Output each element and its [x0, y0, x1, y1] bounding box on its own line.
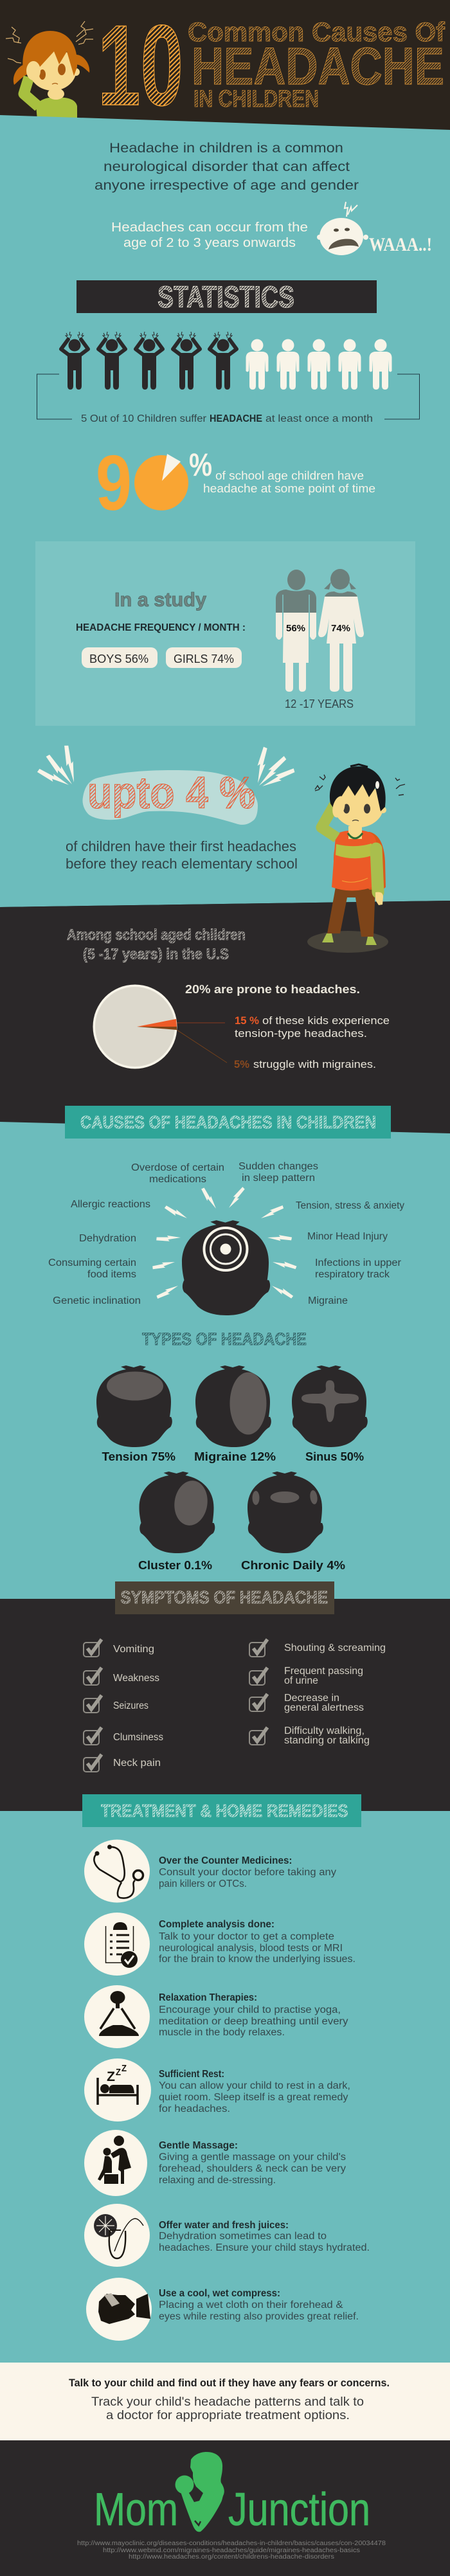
checklist: symptoms right [249, 1639, 386, 1746]
heading: statistics [76, 280, 377, 314]
remedy: cool wet compress: eyes while resting also provides great relief. [159, 2311, 359, 2322]
type: sinus [292, 1365, 368, 1463]
labels: causes: medications [149, 1174, 206, 1185]
text: 5 percent migraines: 5% [234, 1058, 249, 1070]
remedy: sufficient rest: for headaches. [159, 2103, 230, 2114]
remedy: over the counter medicines: Over the Counter Medicines: [159, 1855, 292, 1866]
labels: causes: Allergic reactions [71, 1199, 150, 1210]
pill: girls 74%: GIRLS 74% [174, 653, 234, 665]
sources: http://www.webmd.com/migraines-headaches/guide/migraines-headaches-basics [103, 2547, 360, 2554]
text: first headaches: before they reach elementary school [66, 856, 298, 872]
remedy: gentle massage [84, 2130, 346, 2196]
heading: in a study: In a study [114, 588, 207, 611]
labels: causes: Infections in upper [315, 1257, 401, 1268]
icon: massage figures [84, 2130, 147, 2196]
remedy: sufficient rest: You can allow your child to rest in a dark, [159, 2080, 350, 2091]
intro text: neurological disorder that can affect [104, 159, 350, 174]
stat: 90 percent: 9 [96, 439, 132, 527]
checklist: symptoms right: Shouting & screaming [284, 1643, 386, 1653]
illustration: boy with backpack [307, 764, 405, 953]
remedy: water and juices: Dehydration sometimes can lead to [159, 2231, 327, 2242]
title number 10: 10 [98, 1, 183, 129]
labels: causes [48, 1161, 404, 1306]
remedy: cool wet compress: Placing a wet cloth on their forehead & [159, 2300, 343, 2310]
intro text: Headache in children is a common [109, 141, 343, 156]
checklist: symptoms right: general alertness [284, 1702, 364, 1713]
chart: girl figure 74%: 74% [331, 623, 350, 634]
remedy: relaxation therapies [84, 1985, 348, 2048]
remedy: complete analysis: for the brain to know the underlying issues. [159, 1954, 356, 1965]
heading: causes of headaches [65, 1106, 391, 1139]
caption: 5 out of 10 children: 5 Out of 10 Children suffer [81, 413, 206, 424]
icon: clipboard [84, 1913, 150, 1976]
stat: 90 percent: headache at some point of time [203, 482, 375, 495]
labels: causes: Sudden changes [239, 1161, 318, 1172]
remedy: sufficient rest: Sufficient Rest: [159, 2069, 224, 2080]
checklist: symptoms left: Weakness [113, 1673, 159, 1684]
icon: sleeping in bed: Z [122, 2063, 127, 2074]
heading: symptoms of headache [115, 1581, 334, 1614]
title [98, 1, 446, 129]
chart: 5 of 10 children pictogram [37, 332, 419, 419]
caption: 5 out of 10 children: HEADACHE [210, 413, 262, 424]
icon: radiating bolts [152, 1186, 297, 1300]
age of onset text: age of 2 to 3 years onwards [123, 236, 296, 250]
heading: treatment and home remedies [82, 1794, 361, 1827]
logo: MomJunction [94, 2452, 370, 2535]
type: chronic daily [241, 1472, 345, 1572]
logo: MomJunction: Mom [94, 2484, 178, 2535]
panel: closing advice: Track your child's headache patterns and talk to [91, 2395, 364, 2409]
heading: among school aged children: Among school aged children [67, 926, 246, 944]
labels: causes: Genetic inclination [53, 1295, 141, 1306]
text: first headaches: of children have their first headaches [66, 838, 296, 854]
heading: types of headache: TYPES OF HEADACHE [142, 1329, 307, 1349]
icon: crying baby face [317, 202, 368, 255]
sources [77, 2540, 386, 2561]
checklist: symptoms right: Frequent passing [284, 1666, 363, 1677]
checklist: symptoms right: Decrease in [284, 1693, 339, 1704]
icon: sleeping in bed: Z [107, 2069, 115, 2084]
panel: dark school aged background [0, 901, 450, 1138]
text: 15 percent tension: 15 % [235, 1014, 259, 1027]
sources: http://www.mayoclinic.org/diseases-conditions/headaches-in-children/basics/causes/con-20034478 [77, 2540, 386, 2547]
logo: MomJunction: Junction [228, 2484, 370, 2535]
remedy: complete analysis: Talk to your doctor to get a complete [159, 1931, 334, 1942]
text: first headaches [66, 838, 298, 872]
icon: sleeping in bed: Z [116, 2067, 121, 2078]
remedy: gentle massage: relaxing and de-stressing. [159, 2175, 276, 2186]
checklist: symptoms right: standing or talking [284, 1735, 370, 1746]
text: 5 percent migraines: struggle with migraines. [253, 1058, 376, 1070]
remedy: gentle massage: Giving a gentle massage on your child's [159, 2152, 346, 2163]
checklist: symptoms left: Seizures [113, 1700, 148, 1711]
icon: lightning bolts left [37, 744, 77, 788]
age of onset text [111, 221, 308, 250]
type: cluster: Cluster 0.1% [138, 1559, 212, 1572]
checklist: symptoms right: Difficulty walking, [284, 1725, 364, 1736]
labels: causes: food items [87, 1269, 136, 1280]
remedy: gentle massage: forehead, shoulders & neck can be very [159, 2163, 346, 2174]
callout: WAAA: WAAA..! [369, 234, 432, 255]
chart: pie of prone children [93, 985, 227, 1068]
label: age range: 12 -17 YEARS [285, 698, 354, 710]
remedy: water and juices [84, 2204, 370, 2267]
title line: Common Causes Of: Common Causes Of [188, 17, 446, 47]
text: 15 percent tension [235, 1014, 390, 1040]
checklist: symptoms left [84, 1639, 163, 1772]
icon: head with compress [86, 2278, 152, 2341]
caption: 5 out of 10 children: at least once a month [266, 413, 373, 424]
type: migraine: Migraine 12% [194, 1450, 276, 1463]
stat: 90 percent [96, 439, 375, 527]
text: 15 percent tension: tension-type headaches. [235, 1027, 367, 1040]
panel: header background [0, 0, 450, 135]
labels: causes: Overdose of certain [131, 1162, 224, 1173]
type: migraine [194, 1365, 276, 1463]
heading: causes of headaches: CAUSES OF HEADACHES IN CHILDREN [80, 1112, 376, 1132]
type: sinus: Sinus 50% [305, 1450, 364, 1463]
age of onset text: Headaches can occur from the [111, 221, 308, 235]
illustration: girl holding her head [6, 21, 93, 120]
icon: head with target rings [182, 1220, 270, 1315]
heading: among school aged children [67, 926, 246, 963]
panel: in a study [35, 541, 415, 726]
checklist: symptoms left: Clumsiness [113, 1732, 163, 1743]
panel: footer [0, 2440, 450, 2576]
chart: boy figure 56%: 56% [286, 623, 305, 634]
remedy: relaxation therapies: muscle in the body relaxes. [159, 2027, 285, 2038]
labels: causes: Dehydration [79, 1233, 136, 1244]
labels: causes: Minor Head Injury [307, 1231, 388, 1242]
remedy: sufficient rest [84, 2058, 350, 2121]
labels: causes: in sleep pattern [242, 1173, 315, 1184]
remedy: relaxation therapies: Encourage your child to practise yoga, [159, 2004, 341, 2015]
remedy: cool wet compress: Use a cool, wet compress: [159, 2288, 280, 2299]
checklist: symptoms left: Neck pain [113, 1758, 161, 1769]
pill: girls 74% [166, 647, 242, 668]
callout: upto 4 percent: upto 4 % [87, 768, 255, 818]
remedy: complete analysis: neurological analysis, blood tests or MRI [159, 1943, 343, 1954]
panel: dark symptoms background [0, 1599, 450, 1811]
label: headache frequency: HEADACHE FREQUENCY / MONTH : [76, 622, 246, 633]
panel: teal causes background [0, 1122, 450, 1599]
intro text [94, 141, 359, 193]
remedy: over the counter medicines: Consult your doctor before taking any [159, 1867, 336, 1878]
panel: closing advice: Talk to your child and find out if they have any fears or concerns. [69, 2377, 390, 2389]
type: tension: Tension 75% [102, 1450, 176, 1463]
type: cluster [138, 1472, 215, 1572]
chart: girl figure 74% [318, 569, 364, 692]
stat: 90 percent: % [189, 447, 212, 483]
labels: causes: respiratory track [315, 1269, 390, 1280]
remedy: complete analysis: Complete analysis done: [159, 1919, 274, 1930]
labels: causes: Consuming certain [48, 1257, 136, 1268]
chart: boy figure 56% [276, 570, 316, 692]
remedy: cool wet compress [86, 2278, 359, 2341]
stat: 90 percent: of school age children have [215, 469, 364, 482]
intro text: anyone irrespective of age and gender [94, 178, 359, 193]
checklist: symptoms right: of urine [284, 1675, 318, 1686]
remedy: water and juices: headaches. Ensure your child stays hydrated. [159, 2242, 370, 2253]
type: tension [96, 1365, 176, 1463]
remedy: relaxation therapies: meditation or deep breathing until every [159, 2016, 348, 2027]
icon: stethoscope [84, 1840, 150, 1903]
sources: http://www.headaches.org/content/childrens-headache-disorders [129, 2553, 334, 2561]
remedy: complete analysis [84, 1913, 356, 1976]
remedy: gentle massage: Gentle Massage: [159, 2140, 238, 2151]
heading: symptoms of headache: SYMPTOMS OF HEADACHE [121, 1587, 328, 1607]
heading: among school aged children: (5 -17 years) in the U.S [83, 946, 229, 963]
panel: closing advice: a doctor for appropriate treatment options. [106, 2409, 350, 2422]
caption: 5 out of 10 children [81, 413, 373, 424]
type: chronic daily: Chronic Daily 4% [241, 1559, 345, 1572]
icon: lightning bolts right [254, 746, 296, 789]
panel: teal treatment background [0, 1811, 450, 2363]
checklist: symptoms left: Vomiting [113, 1644, 154, 1655]
panel: closing advice [0, 2363, 450, 2440]
labels: causes: Migraine [308, 1295, 348, 1306]
icon: juice glass and citrus [84, 2204, 150, 2267]
heading: statistics: STATISTICS [158, 280, 294, 314]
icon: sleeping in bed [84, 2058, 151, 2121]
remedy: over the counter medicines [84, 1840, 336, 1903]
text: 20 percent prone: 20% are prone to headaches. [185, 983, 360, 996]
heading: treatment and home remedies: TREATMENT & HOME REMEDIES [101, 1801, 348, 1821]
remedy: sufficient rest: quiet room. Sleep itself is a great remedy [159, 2092, 348, 2103]
remedy: over the counter medicines: pain killers or OTCs. [159, 1878, 247, 1889]
labels: causes: Tension, stress & anxiety [296, 1200, 404, 1211]
pill: boys 56%: BOYS 56% [89, 653, 148, 665]
text: 15 percent tension: of these kids experience [262, 1014, 390, 1027]
remedy: relaxation therapies: Relaxation Therapies: [159, 1992, 257, 2003]
remedy: water and juices: Offer water and fresh juices: [159, 2220, 289, 2231]
icon: yoga pose [84, 1985, 150, 2048]
panel: teal statistics background [0, 115, 450, 907]
pill: boys 56% [82, 647, 158, 668]
title line: IN CHILDREN: IN CHILDREN [194, 86, 319, 112]
